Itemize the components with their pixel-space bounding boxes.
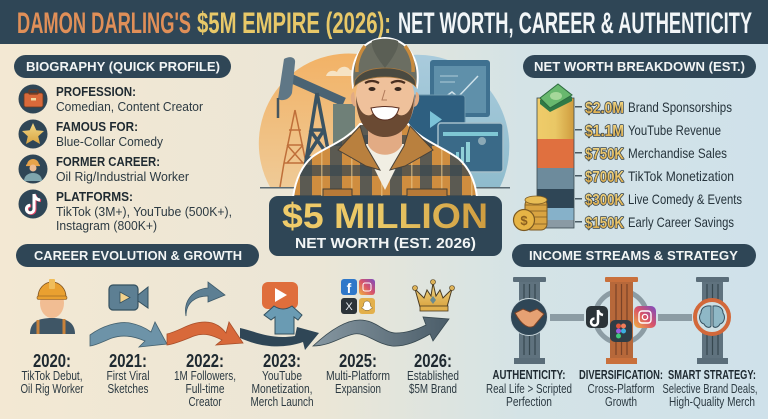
text: famous for: Blue-Collar Comedy bbox=[56, 134, 163, 149]
icon: oil worker bbox=[30, 279, 75, 334]
heading: career: CAREER EVOLUTION & GROWTH bbox=[34, 248, 242, 263]
text: authenticity: AUTHENTICITY: bbox=[492, 367, 566, 382]
title: DAMON DARLING'S bbox=[17, 7, 191, 40]
milestone: 2023: YouTube bbox=[262, 368, 302, 383]
icon: crown bbox=[412, 280, 454, 311]
mouth bbox=[371, 106, 399, 120]
milestone: 2020 bbox=[20, 351, 84, 396]
row: youtube revenue: YouTube Revenue bbox=[628, 122, 721, 138]
row: merchandise sales: Merchandise Sales bbox=[628, 145, 727, 161]
text: famous for: FAMOUS FOR: bbox=[56, 119, 138, 134]
icon: rising arrow bbox=[186, 282, 225, 316]
icon: social grid: X bbox=[345, 301, 353, 313]
icon: t-shirt bbox=[264, 306, 302, 334]
blue backdrop bbox=[410, 55, 509, 187]
stacked bar chart bbox=[537, 98, 574, 228]
row: brand sponsorships: Brand Sponsorships bbox=[628, 99, 732, 115]
text: diversification: Cross-Platform bbox=[588, 381, 654, 396]
horizon line bbox=[260, 187, 510, 188]
milestone: 2022: Full-time bbox=[186, 381, 224, 396]
icon: youtube bbox=[262, 282, 298, 309]
ears bbox=[351, 92, 419, 107]
arrow: 2023 bbox=[240, 327, 319, 350]
milestone: 2022: 1M Followers, bbox=[174, 368, 236, 383]
milestone: 2021: Sketches bbox=[108, 381, 149, 396]
icon: derrick bbox=[280, 110, 310, 187]
beard bbox=[356, 96, 414, 137]
text: platforms bbox=[56, 189, 232, 233]
text: diversification: Growth bbox=[605, 394, 637, 409]
callout: net worth: $5 MILLION bbox=[282, 197, 488, 236]
callout: net worth: NET WORTH (EST. 2026) bbox=[295, 235, 476, 252]
text: profession: PROFESSION: bbox=[56, 84, 136, 99]
icon: coins bbox=[514, 196, 547, 230]
text: diversification: DIVERSIFICATION: bbox=[579, 367, 663, 382]
text: former career: FORMER CAREER: bbox=[56, 154, 160, 169]
t-shirt bbox=[362, 144, 408, 190]
heading: income: INCOME STREAMS & STRATEGY bbox=[529, 248, 738, 263]
milestone: 2023: Merch Launch bbox=[250, 394, 314, 409]
row: live comedy bbox=[575, 191, 742, 209]
row: tiktok monetization: $700K bbox=[585, 169, 624, 186]
icon: tiktok bbox=[18, 190, 48, 218]
icon: pump jack bbox=[278, 57, 355, 186]
collar bbox=[338, 126, 380, 170]
row: youtube revenue bbox=[575, 122, 721, 140]
milestone: 2021: 2021: bbox=[109, 351, 147, 371]
neck bbox=[368, 122, 402, 155]
milestone: 2021: First Viral bbox=[106, 368, 150, 383]
row: brand sponsorships bbox=[575, 99, 732, 117]
milestone: 2022 bbox=[174, 351, 236, 409]
arrow: 2022 bbox=[167, 322, 243, 345]
milestone: 2025: 2025: bbox=[339, 351, 377, 371]
text: platforms: Instagram (800K+) bbox=[56, 218, 157, 233]
cap bbox=[352, 38, 418, 87]
icon: coins: $ bbox=[520, 213, 528, 228]
milestone: 2021 bbox=[106, 351, 150, 396]
milestone: 2026: 2026: bbox=[414, 351, 452, 371]
panel: career evolution bbox=[16, 244, 459, 409]
heading: career bbox=[16, 244, 259, 267]
text: platforms: PLATFORMS: bbox=[56, 189, 133, 204]
sun backdrop bbox=[259, 54, 365, 187]
text: famous for bbox=[56, 119, 163, 149]
row: early savings: Early Career Savings bbox=[628, 214, 734, 230]
connector bars bbox=[550, 314, 692, 321]
pillar: authenticity bbox=[510, 277, 548, 364]
milestone: 2022: Creator bbox=[188, 394, 222, 409]
cloud bbox=[326, 67, 356, 76]
panel: income streams bbox=[486, 244, 758, 409]
hero illustration bbox=[259, 38, 510, 197]
header band bbox=[0, 0, 768, 44]
text: smart strategy bbox=[662, 367, 758, 409]
icon: monitor top bbox=[430, 60, 490, 117]
row: tiktok monetization: TikTok Monetization bbox=[628, 168, 734, 184]
pillar: smart strategy bbox=[695, 277, 729, 364]
icon: tiktok square bbox=[586, 306, 608, 328]
icon: briefcase bbox=[18, 84, 48, 114]
row: early savings: $150K bbox=[585, 215, 624, 232]
milestone: 2022: 2022: bbox=[186, 351, 224, 371]
icon: social grid: f bbox=[347, 280, 352, 296]
milestone: 2026 bbox=[407, 351, 459, 396]
arrow: 2021 bbox=[90, 322, 167, 347]
milestone: 2025 bbox=[326, 351, 390, 396]
row: merchandise sales: $750K bbox=[585, 146, 624, 163]
eyes and brows bbox=[365, 81, 405, 100]
panel: net worth breakdown bbox=[514, 55, 756, 232]
text: profession bbox=[56, 84, 204, 114]
person illustration bbox=[293, 38, 477, 197]
heading: breakdown bbox=[523, 55, 756, 78]
milestone: 2020: Oil Rig Worker bbox=[20, 381, 84, 396]
text: former career bbox=[56, 154, 190, 184]
text: authenticity: Perfection bbox=[506, 394, 552, 409]
text: platforms: TikTok (3M+), YouTube (500K+), bbox=[56, 204, 232, 219]
icon: monitor dashboard bbox=[438, 123, 503, 172]
icon: social grid bbox=[341, 279, 375, 314]
pillar: diversification bbox=[586, 277, 656, 364]
heading: breakdown: NET WORTH BREAKDOWN (EST.) bbox=[534, 59, 745, 74]
icon: cash stack bbox=[540, 84, 572, 112]
panel: biography bbox=[14, 55, 232, 233]
text: diversification bbox=[579, 367, 663, 409]
row: merchandise sales bbox=[575, 145, 727, 163]
milestone: 2025: Expansion bbox=[335, 381, 381, 396]
row: early savings bbox=[575, 214, 734, 232]
row: tiktok monetization bbox=[575, 168, 734, 186]
face bbox=[356, 61, 414, 137]
title bbox=[17, 7, 752, 40]
text: former career: Oil Rig/Industrial Worker bbox=[56, 169, 190, 184]
icon: handshake bbox=[515, 309, 544, 327]
row: youtube revenue: $1.1M bbox=[585, 123, 624, 140]
row: live comedy: $300K bbox=[585, 192, 624, 209]
milestone: 2023: Monetization, bbox=[252, 381, 312, 396]
milestone: 2020: 2020: bbox=[33, 351, 71, 371]
row: live comedy: Live Comedy & Events bbox=[628, 191, 742, 207]
icon: instagram square bbox=[634, 306, 656, 328]
heading: biography: BIOGRAPHY (QUICK PROFILE) bbox=[26, 59, 220, 74]
icon: brain bbox=[700, 306, 724, 327]
milestone: 2023 bbox=[250, 351, 314, 409]
icon: monitor video bbox=[405, 95, 465, 155]
milestone: 2023: 2023: bbox=[263, 351, 301, 371]
heading: biography bbox=[14, 55, 231, 78]
row: brand sponsorships: $2.0M bbox=[585, 100, 624, 117]
icon: worker bbox=[18, 154, 48, 184]
milestone: 2020: TikTok Debut, bbox=[22, 368, 82, 383]
text: authenticity bbox=[486, 367, 572, 409]
text: authenticity: Real Life > Scripted bbox=[486, 381, 572, 396]
icon: figma square bbox=[610, 320, 632, 342]
milestone: 2025: Multi-Platform bbox=[326, 368, 390, 383]
milestone: 2026: Established bbox=[407, 368, 459, 383]
text: profession: Comedian, Content Creator bbox=[56, 99, 204, 114]
pockets bbox=[323, 189, 447, 197]
icon: star bbox=[18, 120, 48, 148]
icon: video camera bbox=[109, 285, 148, 310]
arrow: 2025 to 2026 bbox=[313, 317, 449, 346]
milestone: 2026: $5M Brand bbox=[409, 381, 457, 396]
shirt bbox=[293, 124, 477, 197]
heading: income bbox=[512, 244, 756, 267]
callout: net worth bbox=[269, 196, 502, 256]
title: $5M EMPIRE (2026): bbox=[197, 7, 391, 40]
